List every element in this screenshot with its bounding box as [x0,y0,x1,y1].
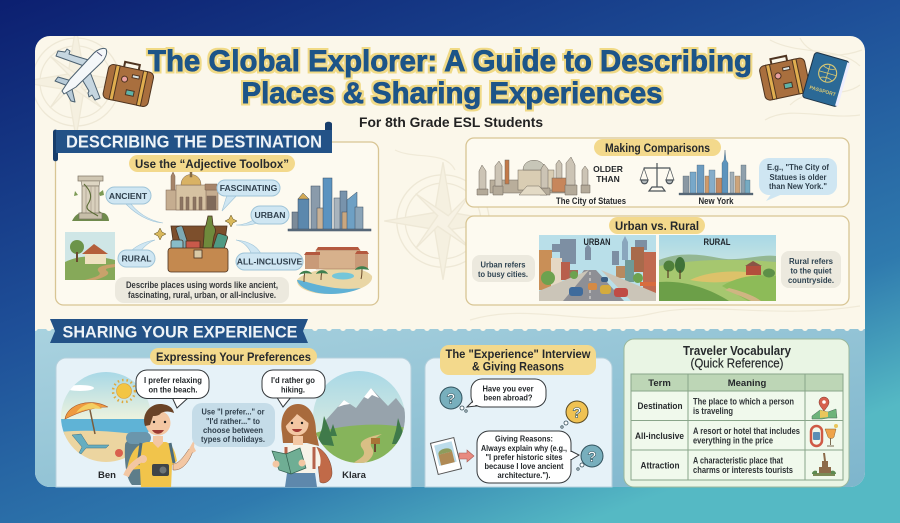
icon: ancient column [72,176,109,221]
callout: use I prefer [192,403,275,447]
icon: tower [812,453,836,476]
icon: airplane [55,48,107,102]
title [148,45,752,110]
pill: interview heading [440,345,596,375]
speech bubble: giving reasons [477,431,579,483]
callout: urban definition [472,255,535,282]
icon: passport [802,52,851,107]
bubble: ancient [106,187,163,223]
speech bubble: Klara: hiking. [281,384,305,394]
speech bubble: Klara: I'd rather go [271,375,315,385]
table: vocabulary: Meaning [728,378,766,389]
table: vocabulary: Term [648,378,671,389]
speech bubble: Ben: I prefer relaxing [144,375,202,385]
illustration: beach scene [60,372,152,466]
table: vocabulary: The place to which a person [693,396,794,408]
callout: use I prefer: choose between [203,425,263,435]
heading: traveler vocabulary: (Quick Reference) [690,356,784,370]
text: describe places note [115,277,289,303]
callout: comparison example: E.g., "The City of [767,162,829,172]
icon: sun [113,380,135,402]
callout: rural definition [781,251,841,288]
icon: resort [297,247,372,294]
illustration: urban street: URBAN [584,237,610,247]
label: new york: New York [698,196,734,206]
speech bubble: giving reasons: Giving Reasons: [495,434,553,444]
table: vocabulary: A resort or hotel that includes [693,426,800,437]
text: describe places note: Describe places using words like ancient, [126,280,278,290]
icon: passport: PASSPORT [809,85,836,98]
speech bubble: Klara [262,370,325,407]
speech bubble: giving reasons: "I prefer historic sites [486,452,563,462]
icon: question bubble left: ? [446,390,456,408]
callout: urban definition: Urban refers [480,260,526,270]
icon: suitcase left [102,59,155,107]
table: vocabulary: everything in the price [693,436,773,446]
callout: rural definition: to the quiet [790,266,832,276]
icon: question bubble right: ? [587,448,597,466]
title: The Global Explorer: A Guide to Describing [148,45,752,78]
heading: traveler vocabulary [683,344,791,370]
table: vocabulary: All-inclusive [635,431,684,442]
table: vocabulary: Destination [638,401,683,412]
icon: city skyline [288,178,371,231]
table: vocabulary: is traveling [693,406,733,417]
title: Places & Sharing Experiences [242,77,662,110]
bubble: all-inclusive: ALL-INCLUSIVE [237,256,302,266]
icon: question bubble yellow [561,401,588,428]
label: Ben: Ben [98,470,116,481]
panel: traveler vocabulary [624,339,849,487]
text: older than [593,164,623,184]
label: Klara: Klara [342,470,367,481]
illustration: mountain scene [312,370,410,464]
icon: question bubble yellow: ? [572,404,582,422]
bubble: fascinating: FASCINATING [220,183,278,193]
pill: making comparisons: Making Comparisons [605,141,710,155]
callout: use I prefer: types of holidays. [201,434,265,444]
illustration: urban street [539,235,656,301]
arrow: photo to reasons [459,450,474,462]
table: vocabulary: Attraction [640,460,680,472]
table: vocabulary: A characteristic place that [693,456,784,466]
bubble: urban: URBAN [254,210,286,220]
speech bubble: Ben: on the beach. [148,384,198,394]
speech bubble: giving reasons: because I love ancient [484,461,564,471]
pill: expressing your preferences: Expressing Your Preferences [156,350,311,364]
table: vocabulary: charms or interests tourists [693,465,793,476]
icon: adjective toolbox [154,215,237,272]
label: the city of statues: The City of Statues [556,196,626,206]
bubble: rural: RURAL [121,254,152,264]
illustration: rural landscape [659,235,776,301]
pill: urban vs rural: Urban vs. Rural [615,219,699,233]
callout: urban definition: to busy cities. [478,269,528,279]
panel: making comparisons [466,138,849,207]
panel: describing the destination [56,142,378,305]
text: older than: THAN [596,174,620,184]
bubble: ancient: ANCIENT [109,191,148,201]
pill: interview heading: & Giving Reasons [472,362,564,374]
bubble: all-inclusive [236,240,303,270]
icon: question bubble left [440,387,467,412]
callout: rural definition: Rural refers [789,256,833,266]
icon: city of statues [477,157,590,195]
heading: describing the destination: DESCRIBING THE DESTINATION [66,132,322,152]
icon: new york skyline [679,150,753,195]
speech bubble: have you been abroad: Have you ever [482,384,534,394]
speech bubble: giving reasons: Always explain why (e.g., [481,443,567,453]
icon: wristband and cocktail [811,424,838,446]
callout: use I prefer: Use "I prefer..." or [202,406,265,416]
icon: scales [640,163,674,191]
illustration: rural landscape: RURAL [704,237,731,247]
speech bubble: have you been abroad: been abroad? [484,392,532,402]
heading: sharing your experience: SHARING YOUR EXPERIENCE [62,322,298,342]
heading: traveler vocabulary: Traveler Vocabulary [683,344,791,358]
bubble: urban [236,206,289,225]
bubble: fascinating [217,180,280,211]
heading: describing the destination [53,122,332,161]
speech bubble: have you been abroad [467,379,546,407]
panel: experience interview [425,345,612,487]
bubble: rural [118,240,155,267]
pill: adjective toolbox heading: Use the “Adjective Toolbox” [135,157,289,171]
speech bubble: Ben [136,370,209,408]
text: older than: OLDER [593,164,623,174]
icon: map pin [812,397,837,419]
callout: use I prefer: "I'd rather..." to [206,416,260,426]
subtitle: For 8th Grade ESL Students [359,114,543,130]
character: Klara [272,404,332,487]
character: Ben [125,404,196,489]
speech bubble: giving reasons: architecture."). [498,470,550,480]
pill: interview heading: The "Experience" Interview [446,349,591,361]
callout: comparison example: than New York." [769,181,827,191]
callout: comparison example: Statues is older [770,172,827,182]
table: vocabulary [631,374,843,480]
icon: palace [166,172,218,210]
text: describe places note: fascinating, rural, urban, or all-inclusive. [128,290,276,300]
icon: suitcase right [758,52,811,101]
callout: rural definition: countryside. [788,275,834,285]
panel: urban vs rural [466,216,849,305]
callout: comparison example [759,158,837,201]
panel: expressing your preferences [56,348,411,489]
icon: question bubble right [577,445,603,470]
icon: rural house [65,232,115,280]
icon: photograph [430,438,462,474]
